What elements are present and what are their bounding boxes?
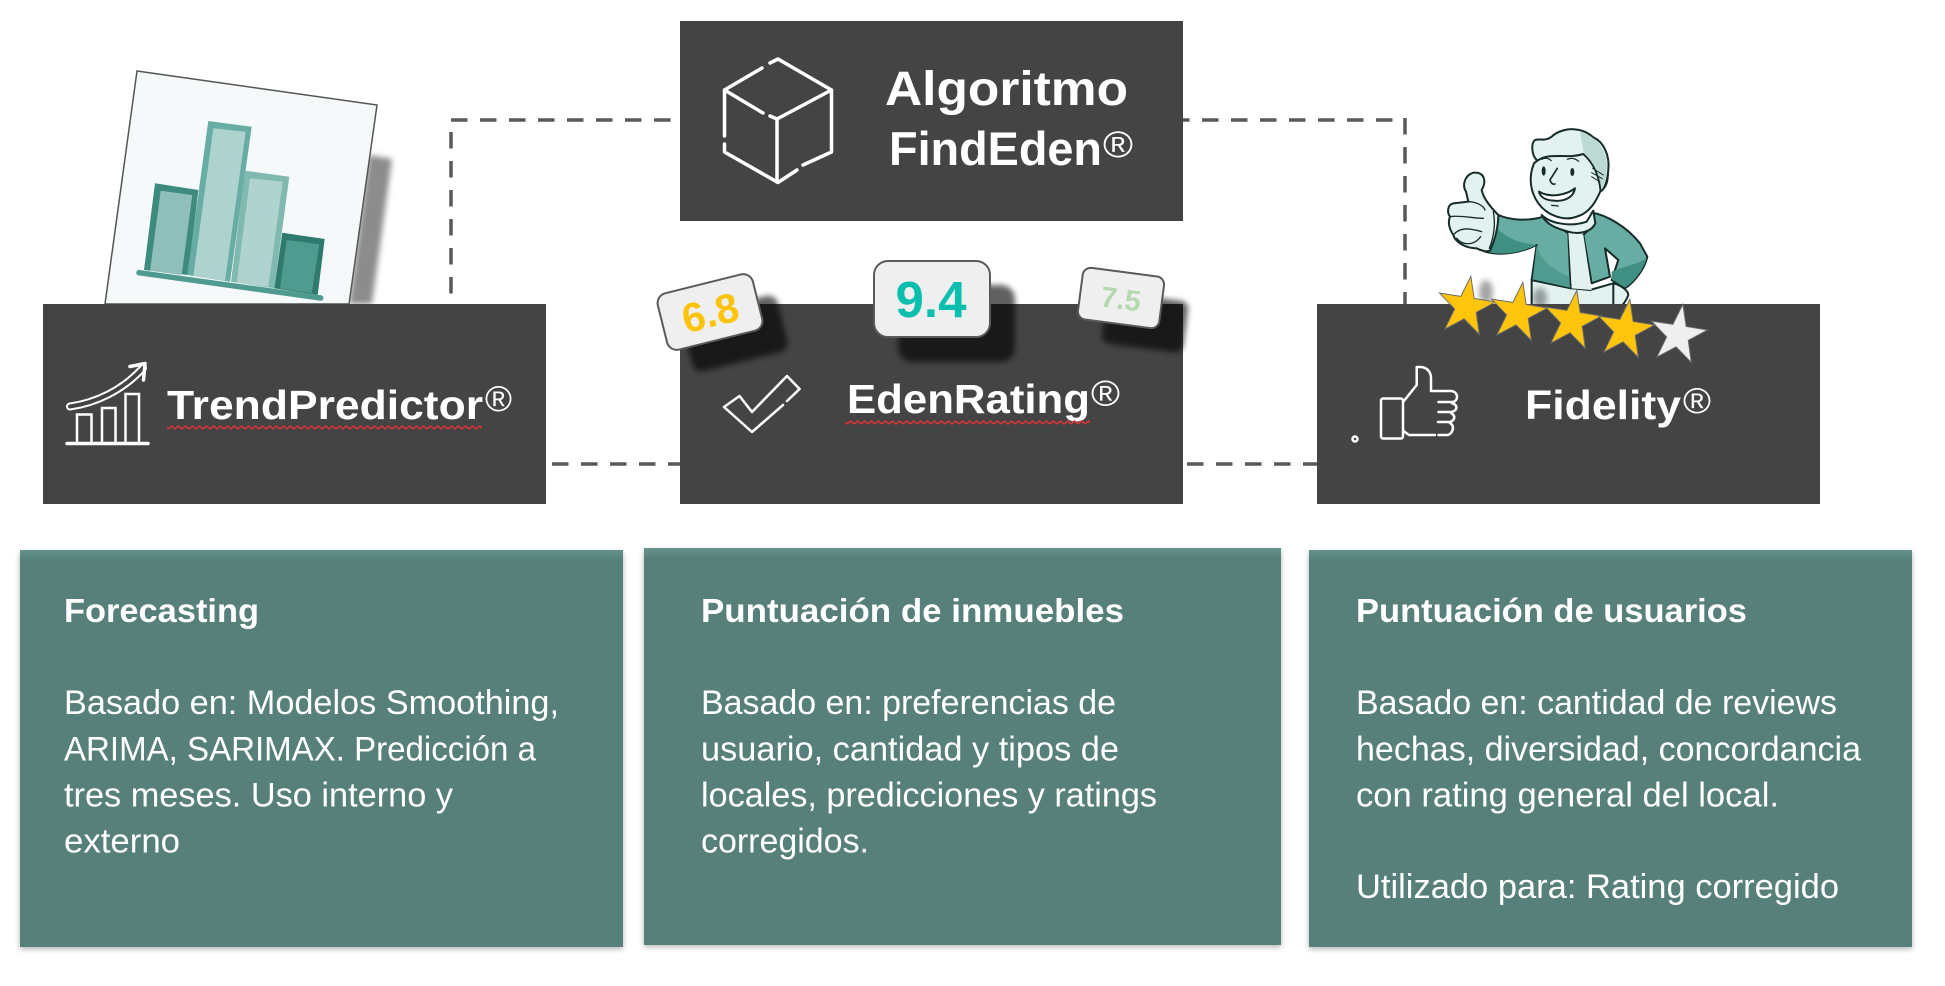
text: usuarios description: hechas, diversidad, concordancia	[1356, 730, 1861, 768]
heading: Algoritmo FindEden	[885, 63, 1133, 175]
icon: cube	[724, 59, 832, 182]
panel: Puntuación de usuarios	[1309, 550, 1912, 949]
heading: Puntuación de usuarios: Puntuación de usuarios	[1356, 592, 1747, 629]
panel: Algoritmo FindEden	[680, 21, 1183, 221]
rating card: 6.8: 6.8	[677, 284, 743, 342]
rating card: 9.4: 9.4	[896, 271, 967, 328]
heading: Algoritmo FindEden: Algoritmo	[885, 63, 1128, 116]
heading: Fidelity: ®	[1683, 380, 1711, 421]
panel: TrendPredictor	[43, 304, 546, 504]
heading: EdenRating: EdenRating	[847, 376, 1090, 422]
rating card: 7.5	[1074, 267, 1192, 353]
heading: Puntuación de inmuebles: Puntuación de inmuebles	[701, 592, 1124, 629]
icon: growth chart	[67, 364, 148, 444]
panel: Forecasting	[20, 550, 623, 949]
heading: Fidelity: Fidelity	[1525, 382, 1681, 428]
text: Forecasting description: externo	[64, 822, 180, 860]
heading: Algoritmo FindEden: FindEden	[889, 122, 1102, 175]
heading: TrendPredictor: ®	[485, 378, 512, 419]
text: inmuebles description: Basado en: preferencias de	[701, 684, 1116, 722]
panel: Puntuación de inmuebles	[644, 548, 1281, 947]
heading: TrendPredictor: TrendPredictor	[167, 382, 483, 428]
connector lines	[451, 118, 1405, 464]
text: inmuebles description: locales, predicciones y ratings	[701, 776, 1157, 814]
rating card: 6.8	[655, 267, 790, 378]
panel: Fidelity	[1317, 304, 1820, 504]
text: Forecasting description	[64, 684, 559, 860]
panel: EdenRating	[680, 304, 1183, 504]
heading: Algoritmo FindEden: ®	[1103, 124, 1133, 165]
star shadows	[1479, 280, 1547, 308]
text: Forecasting description: tres meses. Uso interno y	[64, 776, 453, 814]
text: inmuebles description: corregidos.	[701, 822, 869, 860]
rating card: 7.5: 7.5	[1099, 281, 1143, 318]
text: inmuebles description: usuario, cantidad y tipos de	[701, 730, 1119, 768]
icon: check mark	[724, 376, 800, 432]
text: Forecasting description: Basado en: Modelos Smoothing,	[64, 684, 559, 722]
text: usuarios description: Basado en: cantidad de reviews	[1356, 684, 1837, 722]
illustration: thumbs-up mascot	[1448, 129, 1647, 307]
rating card: 9.4	[874, 261, 1015, 362]
text: Forecasting description: ARIMA, SARIMAX. Predicción a	[64, 730, 536, 768]
text: inmuebles description	[701, 684, 1157, 860]
star rating	[1434, 272, 1711, 364]
illustration: bar chart paper	[105, 71, 392, 304]
heading: Forecasting: Forecasting	[64, 592, 259, 629]
heading: EdenRating: ®	[1091, 372, 1120, 414]
icon: thumbs up	[1352, 367, 1457, 442]
text: usuarios description: con rating general del local.	[1356, 776, 1779, 814]
text: usuarios description	[1356, 684, 1861, 906]
text: usuarios description: Utilizado para: Rating corregido	[1356, 868, 1839, 906]
